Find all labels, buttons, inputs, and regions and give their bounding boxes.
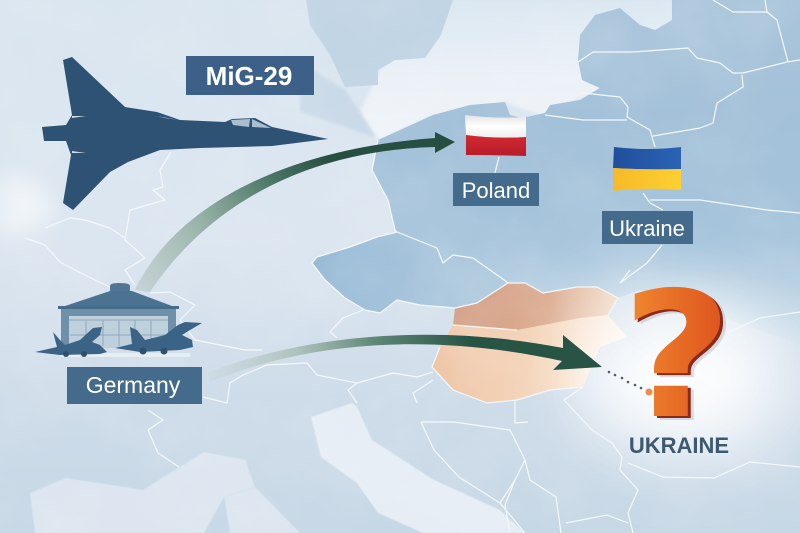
Baltic sea light <box>360 0 672 140</box>
icon: Ukraine flag <box>613 147 681 191</box>
label: Poland <box>453 173 539 206</box>
label: Germany: Germany <box>86 372 181 398</box>
label: MiG-29: MiG-29 <box>206 61 292 91</box>
Denmark patches <box>300 62 376 138</box>
label: Ukraine: Ukraine <box>609 216 685 241</box>
Sweden <box>306 0 453 87</box>
icon: Poland flag <box>465 115 526 156</box>
arrow: Germany to Poland <box>135 132 455 292</box>
icon: hangar with two jets <box>35 283 202 357</box>
jet left <box>35 327 107 355</box>
icon: question mark: ? <box>627 259 739 462</box>
icon: question mark: ? <box>624 257 736 460</box>
region: Baltics, Poland, Ukraine blue <box>372 0 800 345</box>
dotted line to destination <box>608 371 652 396</box>
light patch west <box>0 175 55 238</box>
region: Czechia <box>312 232 508 313</box>
label: Germany <box>67 367 202 404</box>
label: Ukraine <box>602 211 693 244</box>
glow around question mark <box>577 300 787 456</box>
Tyrrhenian sea <box>30 452 255 533</box>
icon: question mark: ? <box>621 255 733 458</box>
label: Poland: Poland <box>462 178 530 203</box>
jet silhouette: MiG-29 <box>42 57 328 210</box>
jet right <box>115 322 202 352</box>
arrow: Germany towards Ukraine <box>207 335 602 382</box>
Adriatic sea <box>311 403 525 533</box>
region: Hungary <box>432 315 627 403</box>
label: MiG-29 <box>186 56 314 95</box>
label: UKRAINE: UKRAINE <box>629 433 729 458</box>
region: Slovakia <box>453 283 627 337</box>
